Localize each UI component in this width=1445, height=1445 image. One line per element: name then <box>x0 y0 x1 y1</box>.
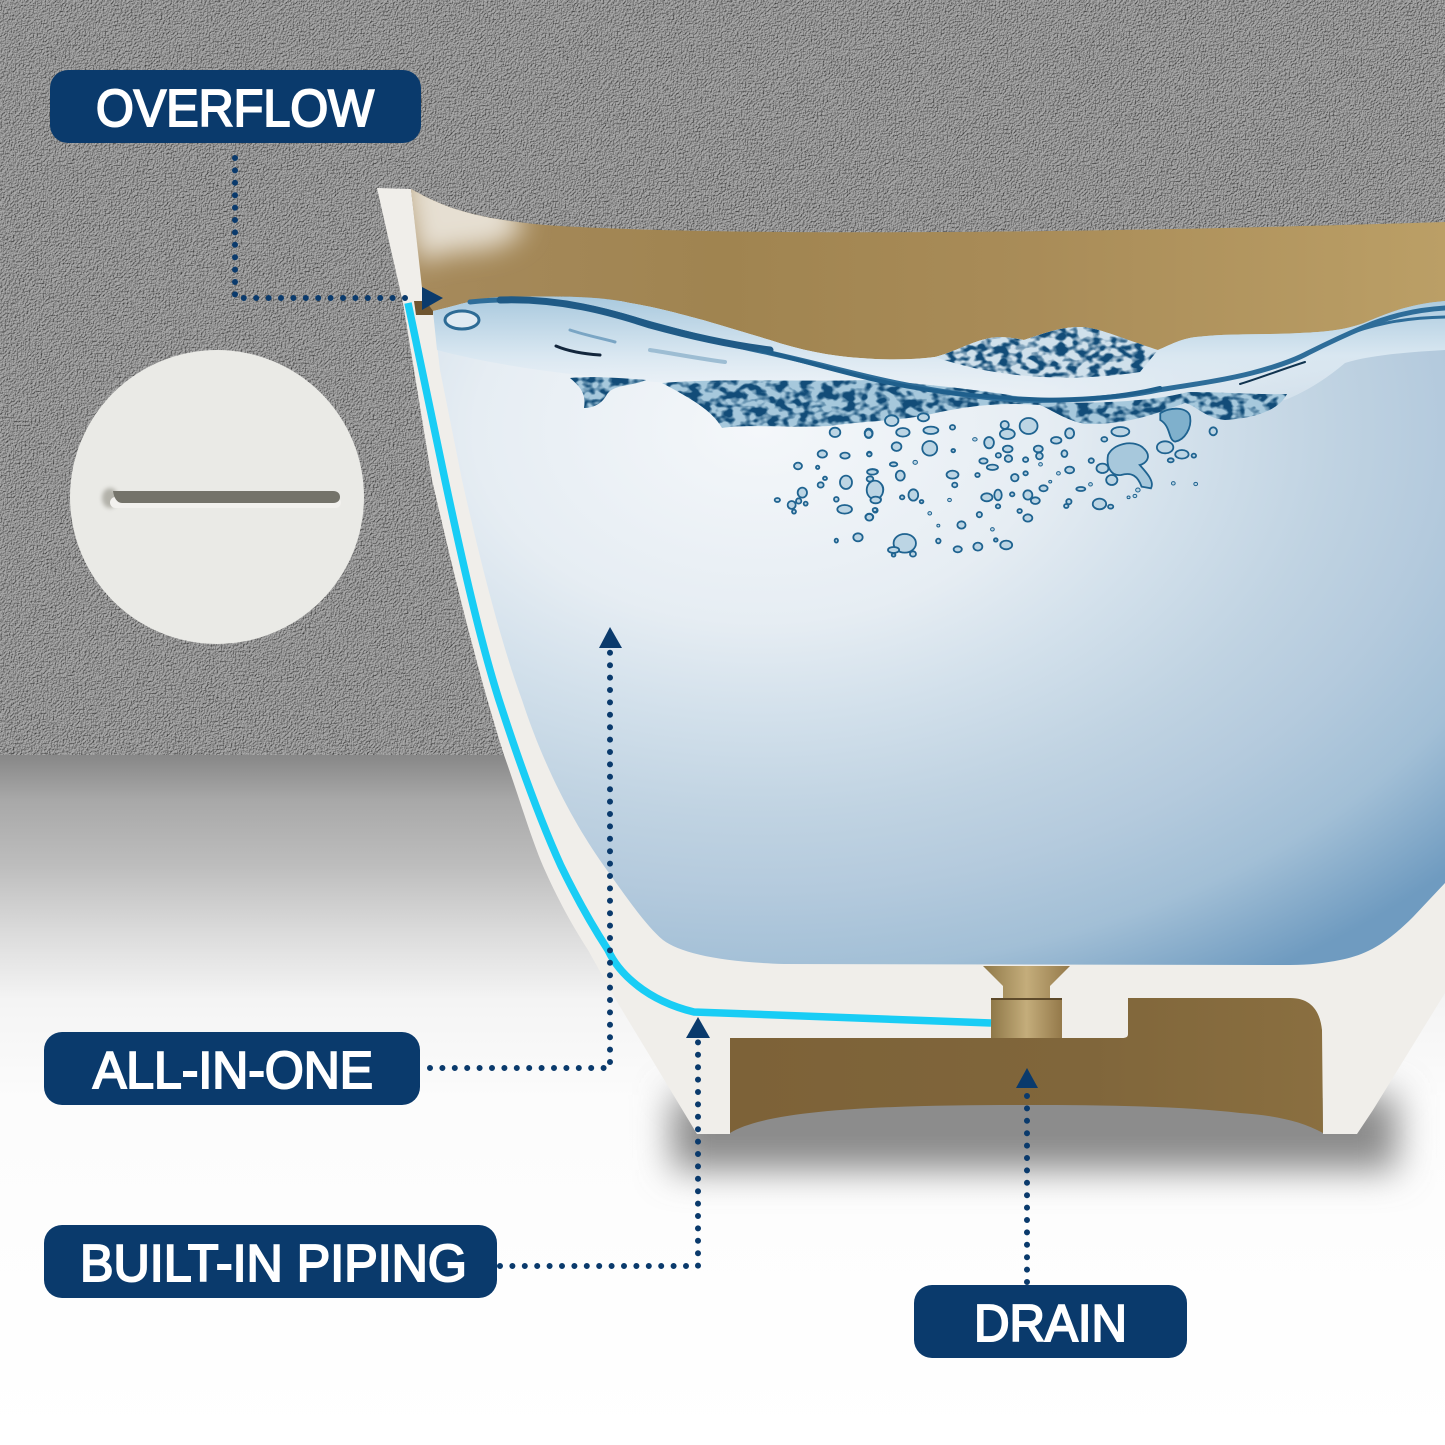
label: OVERFLOW <box>50 70 421 143</box>
dotted leader: drain <box>1016 1068 1038 1282</box>
dotted leader: built-in piping <box>500 1017 710 1266</box>
label: ALL-IN-ONE: ALL-IN-ONE <box>93 1042 373 1100</box>
tub floor shadow <box>672 1095 1397 1170</box>
tub shell: white cross-section <box>377 188 1445 1134</box>
background: floor <box>0 755 1445 1445</box>
wave dark crest line <box>470 300 1445 400</box>
dotted leader: all-in-one <box>430 627 622 1068</box>
dotted leader: overflow <box>235 158 443 310</box>
foam crown above the waterline <box>935 327 1158 378</box>
base cavity: brass underside <box>730 998 1323 1133</box>
water surface wave band <box>433 297 1445 403</box>
label: BUILT-IN PIPING: BUILT-IN PIPING <box>80 1235 467 1293</box>
water body <box>433 301 1445 965</box>
drain fitting <box>983 966 1070 1038</box>
overflow slot <box>414 301 433 315</box>
rising bubbles: main cluster <box>865 409 1217 557</box>
built-in piping: cyan line <box>408 303 991 1023</box>
surface air bubble <box>445 311 479 329</box>
foam clusters under the surface <box>570 377 1287 428</box>
overflow cover: round plate with slot <box>70 350 364 644</box>
tub back wall: brass interior above the water <box>411 189 1445 359</box>
background: textured wall <box>0 0 1445 755</box>
label: DRAIN <box>914 1285 1187 1358</box>
label: OVERFLOW: OVERFLOW <box>96 80 374 138</box>
label: DRAIN: DRAIN <box>974 1295 1127 1353</box>
pale highlight on the brass wall <box>400 170 525 262</box>
label: ALL-IN-ONE <box>44 1032 420 1105</box>
rising bubbles: left cluster <box>775 428 883 543</box>
